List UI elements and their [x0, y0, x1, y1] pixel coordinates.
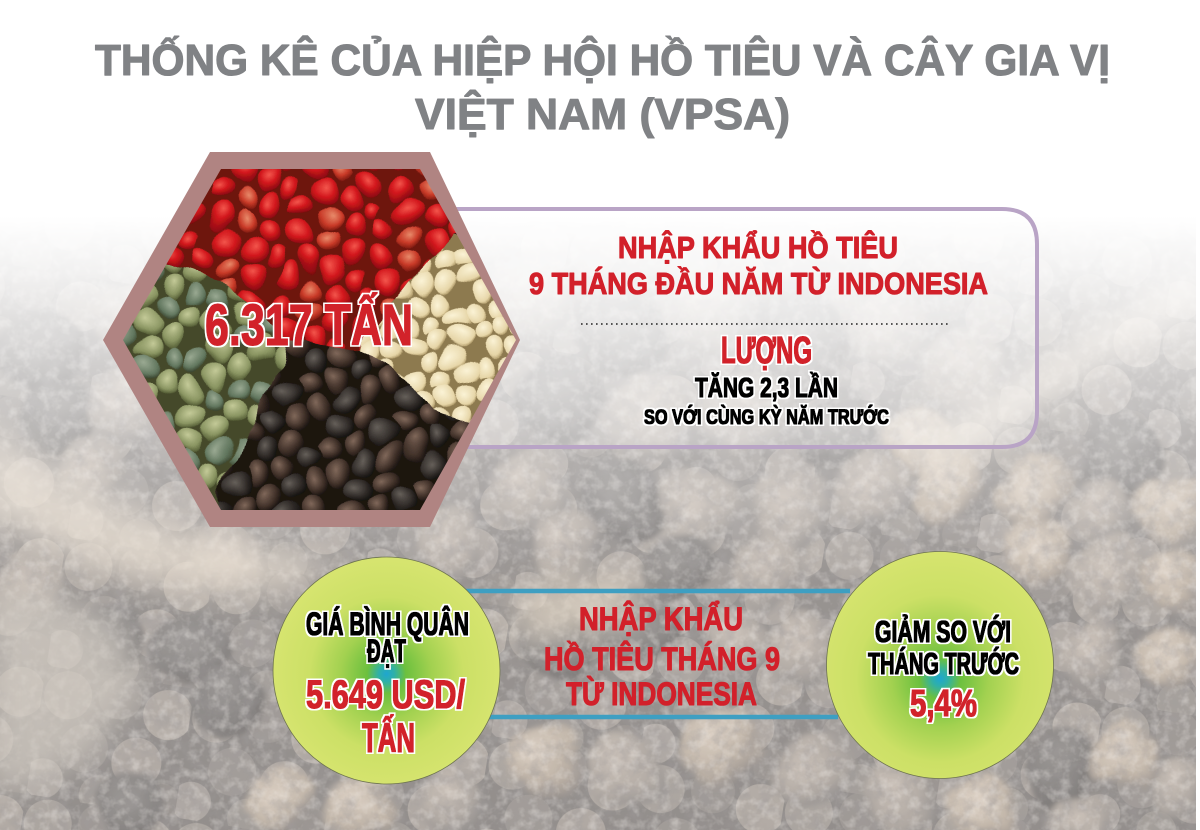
- circle: month-on-month decrease: [826, 552, 1054, 778]
- tonnage value: 6.317 TẤN: [205, 293, 413, 358]
- price label: [306, 606, 469, 669]
- center heading: nhập khẩu tháng 9: NHẬP KHẨU: [579, 601, 743, 637]
- title: [95, 34, 1110, 139]
- panel heading: [529, 229, 988, 301]
- price value: TẤN: [362, 714, 415, 761]
- hexagon: pepper photo with tonnage: [100, 150, 530, 530]
- decrease label: [868, 613, 1019, 681]
- circle: average price: [273, 557, 500, 784]
- price label: ĐẠT: [367, 633, 406, 669]
- stat comparison: SO VỚI CÙNG KỲ NĂM TRƯỚC: [644, 405, 889, 429]
- decrease value: 5,4%: [910, 683, 977, 725]
- stat label: LƯỢNG: [721, 330, 812, 372]
- price label: GIÁ BÌNH QUÂN: [306, 606, 469, 642]
- decrease label: THÁNG TRƯỚC: [868, 645, 1019, 681]
- panel: nhập khẩu 9 tháng: [440, 209, 1037, 447]
- stat value: TĂNG 2,3 LẦN: [695, 372, 838, 403]
- price value: [306, 673, 465, 761]
- panel heading: 9 THÁNG ĐẦU NĂM TỪ INDONESIA: [529, 265, 988, 301]
- connector lines: [465, 591, 850, 717]
- decrease label: GIẢM SO VỚI: [875, 613, 1011, 649]
- price value: 5.649 USD/: [306, 673, 465, 717]
- panel heading: NHẬP KHẨU HỒ TIÊU: [618, 229, 898, 265]
- center heading: nhập khẩu tháng 9: HỒ TIÊU THÁNG 9: [544, 641, 780, 677]
- center heading: nhập khẩu tháng 9: TỪ INDONESIA: [566, 676, 757, 712]
- center heading: nhập khẩu tháng 9: [544, 601, 780, 712]
- title: VIỆT NAM (VPSA): [415, 89, 790, 139]
- title: THỐNG KÊ CỦA HIỆP HỘI HỒ TIÊU VÀ CÂY GIA VỊ: [95, 34, 1110, 85]
